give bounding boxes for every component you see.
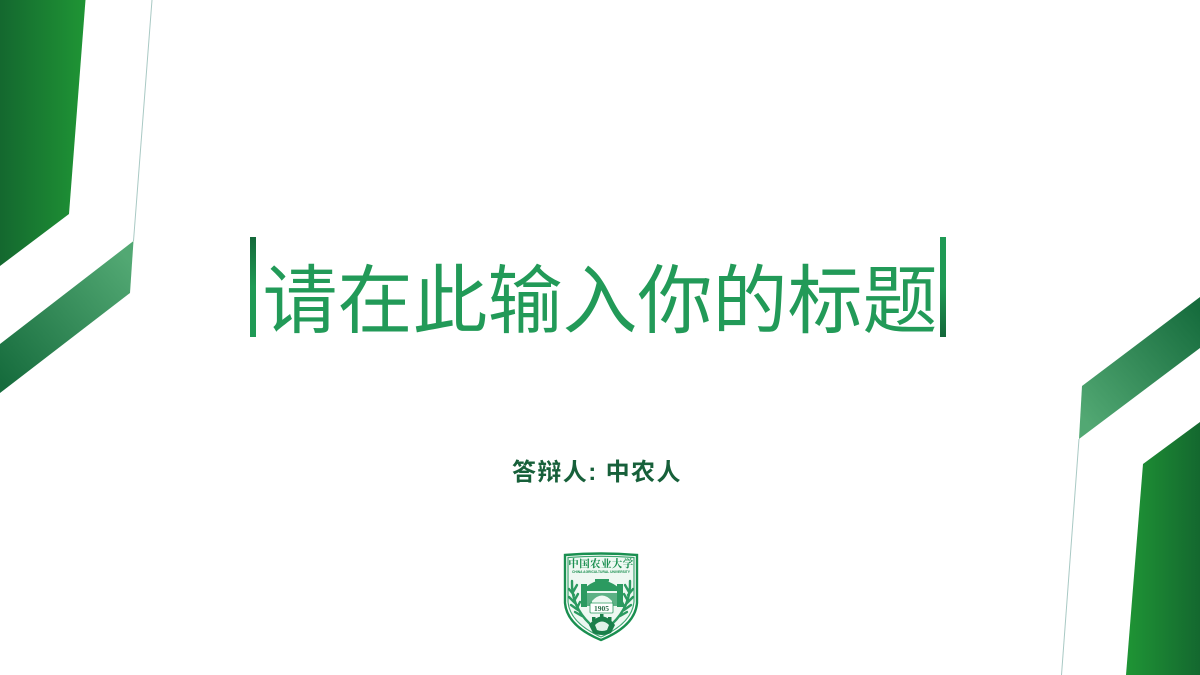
title left bar bbox=[250, 237, 256, 337]
crest year plaque bbox=[590, 603, 613, 613]
title: 请在此输入你的标题 bbox=[262, 259, 938, 343]
bottom-right thin line bbox=[1062, 439, 1079, 675]
bottom-right dark green shape bbox=[1126, 422, 1200, 675]
top-left diagonal band bbox=[0, 241, 134, 393]
title right bar bbox=[940, 237, 946, 337]
crest name: 中国农业大学 bbox=[568, 557, 634, 570]
crest gear bbox=[589, 614, 615, 635]
bottom-right diagonal band bbox=[1079, 297, 1200, 439]
top-left dark green shape bbox=[0, 0, 86, 266]
crest gate bbox=[581, 579, 623, 607]
top-left thin line bbox=[134, 0, 152, 241]
crest english name: CHINA AGRICULTURAL UNIVERSITY bbox=[572, 569, 630, 574]
presenter line: 答辩人: 中农人 bbox=[512, 459, 682, 486]
crest year: 1905 bbox=[594, 604, 609, 613]
crest shield bbox=[565, 554, 637, 640]
icon: university crest bbox=[565, 554, 637, 640]
crest wheat ears bbox=[569, 581, 633, 624]
